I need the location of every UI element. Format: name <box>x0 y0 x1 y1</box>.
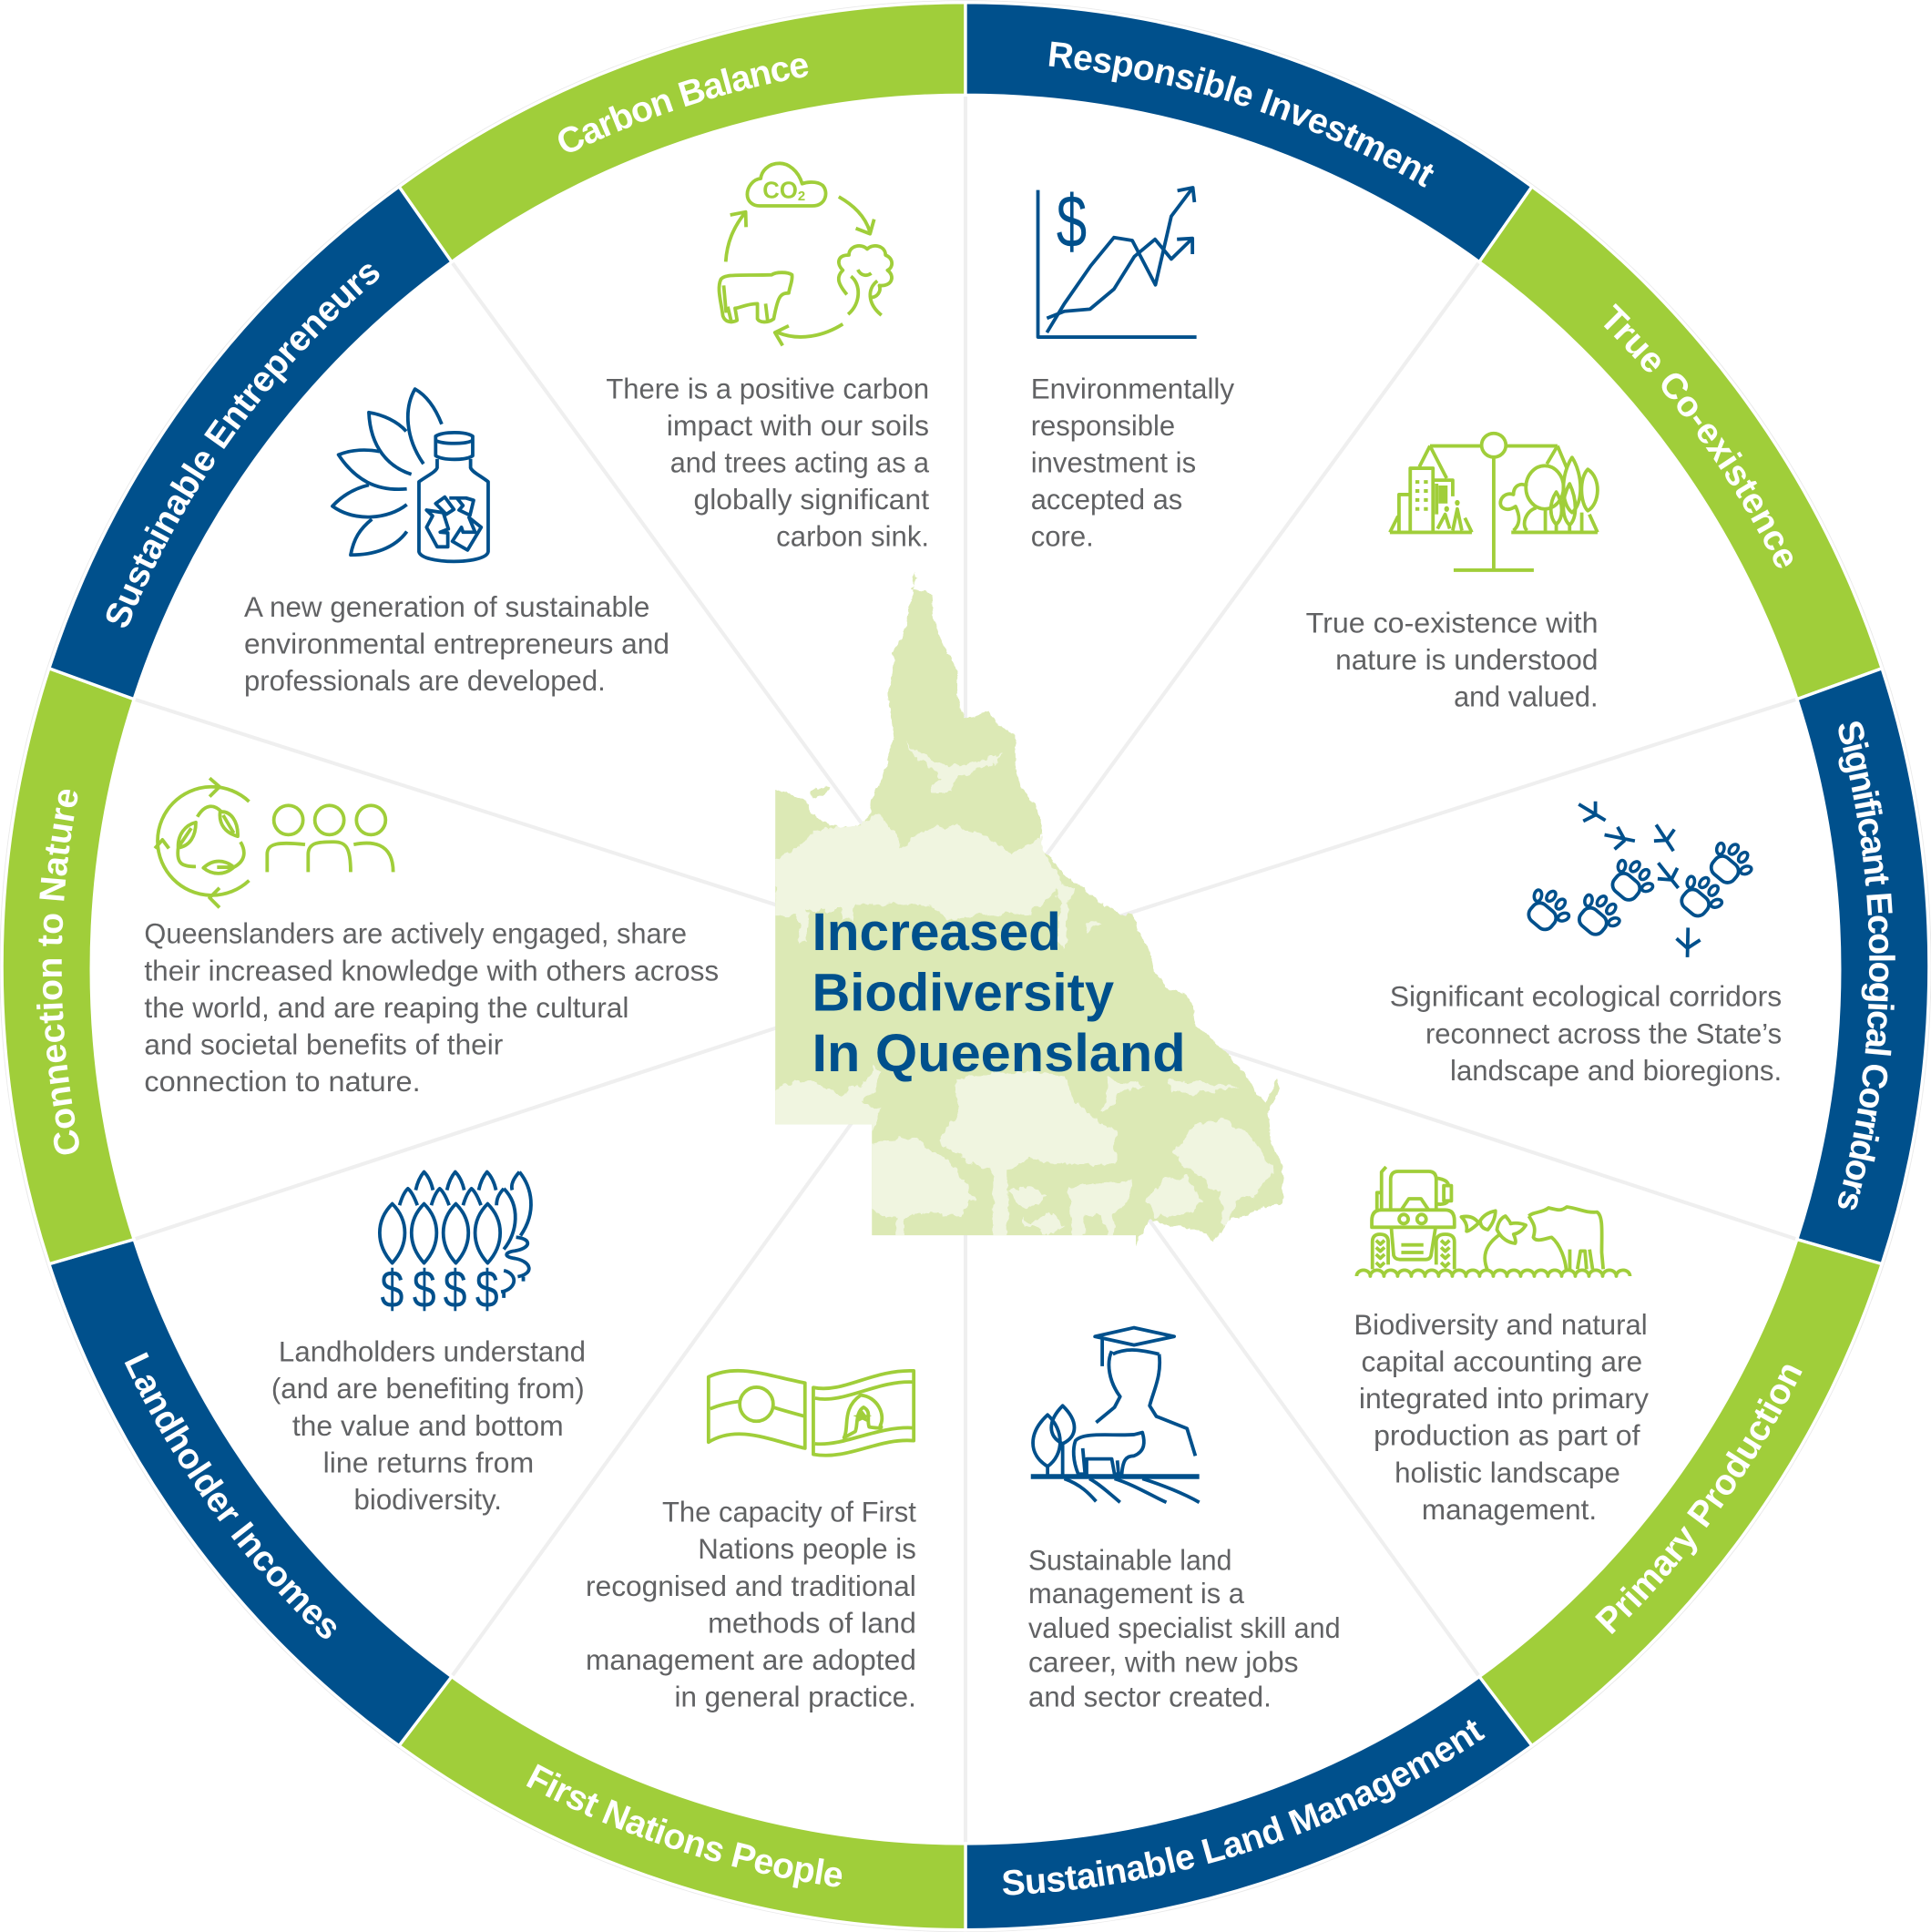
text: first nations people: management are adopted <box>586 1644 916 1676</box>
text: landholder incomes: the value and bottom <box>292 1410 564 1442</box>
icon: carbon cycle: 2 <box>798 189 805 204</box>
text: landholder incomes: (and are benefiting from) <box>271 1373 585 1405</box>
panel: responsible investment <box>964 1 1568 553</box>
label: sustainable land management: Sustainable Land Management <box>1003 1720 1486 1895</box>
text: connection to nature: the world, and are reaping the cultural <box>144 992 628 1024</box>
title <box>812 903 1186 1083</box>
text: sustainable land management: valued specialist skill and <box>1028 1612 1341 1644</box>
text: first nations people <box>586 1497 916 1713</box>
band: carbon balance <box>399 3 966 262</box>
text: responsible investment: responsible <box>1031 410 1175 442</box>
text: sustainable entrepreneurs: professionals are developed. <box>244 665 606 697</box>
panel: carbon balance <box>363 1 1002 563</box>
icon: balance scale city and forest <box>1390 434 1598 570</box>
text: sustainable land management <box>1028 1544 1341 1713</box>
text: landholder incomes: biodiversity. <box>354 1484 502 1516</box>
label: connection to nature: Connection to Nature <box>36 790 79 1155</box>
text: primary production <box>1354 1309 1649 1526</box>
text: sustainable entrepreneurs: environmental entrepreneurs and <box>244 629 669 660</box>
panel: landholder incomes <box>18 1136 586 1746</box>
text: connection to nature <box>144 918 719 1098</box>
text: sustainable land management: career, with new jobs <box>1028 1647 1299 1679</box>
text: true co-existence: True co-existence with <box>1306 608 1598 639</box>
panel: sustainable land management <box>929 1326 1532 1931</box>
text: primary production: integrated into primary <box>1359 1383 1649 1415</box>
icon: dollar crops <box>380 1172 531 1319</box>
text: significant ecological corridors: landscape and bioregions. <box>1450 1055 1782 1087</box>
text: true co-existence <box>1306 608 1598 713</box>
text: significant ecological corridors <box>1390 981 1782 1087</box>
text: responsible investment: accepted as <box>1031 484 1182 516</box>
text: carbon balance <box>606 373 930 553</box>
text: responsible investment: core. <box>1031 521 1094 553</box>
panel: true co-existence <box>1306 186 1883 713</box>
band: connection to nature <box>2 669 134 1264</box>
panel: first nations people <box>363 1368 967 1931</box>
text: responsible investment: Environmentally <box>1031 373 1235 404</box>
text: first nations people: in general practice. <box>675 1682 916 1713</box>
text: first nations people: The capacity of First <box>662 1497 916 1528</box>
panel: connection to nature <box>0 632 719 1265</box>
label: responsible investment: Responsible Investment <box>1049 42 1434 188</box>
icon: leaves and recycling bottle <box>332 389 488 561</box>
icon: tractor plant and cow <box>1356 1167 1630 1276</box>
text: landholder incomes: Landholders understand <box>279 1336 586 1368</box>
text: significant ecological corridors: reconnect across the State’s <box>1425 1017 1782 1049</box>
band: sustainable entrepreneurs <box>49 187 452 700</box>
text: significant ecological corridors: Significant ecological corridors <box>1390 981 1782 1013</box>
text: first nations people: Nations people is <box>698 1533 916 1565</box>
map of Queensland with wildlife silhouettes <box>766 572 1282 1248</box>
text: connection to nature: their increased knowledge with others across <box>144 955 719 986</box>
icon: dollar crops: $ <box>475 1260 499 1319</box>
text: first nations people: methods of land <box>708 1607 916 1639</box>
text: carbon balance: impact with our soils <box>667 410 929 442</box>
icon: dollar crops: $ <box>444 1260 466 1319</box>
text: landholder incomes: line returns from <box>323 1446 534 1478</box>
band: true co-existence <box>1479 187 1882 700</box>
text: sustainable entrepreneurs <box>244 591 669 697</box>
title: Increased <box>812 903 1061 962</box>
text: carbon balance: globally significant <box>693 484 929 516</box>
label: landholder incomes: Landholder Incomes <box>124 1352 337 1639</box>
text: responsible investment <box>1031 373 1235 553</box>
text: connection to nature: and societal benefits of their <box>144 1028 503 1060</box>
band: sustainable land management <box>966 1677 1532 1930</box>
label: significant ecological corridors: Significant Ecological Corridors <box>1838 721 1895 1210</box>
icon: dollar crops: $ <box>381 1260 404 1319</box>
panel: significant ecological corridors <box>1355 667 1931 1301</box>
text: carbon balance: There is a positive carbon <box>606 373 929 404</box>
text: connection to nature: Queenslanders are actively engaged, share <box>144 918 687 950</box>
text: sustainable land management: and sector created. <box>1028 1682 1272 1713</box>
panel: sustainable entrepreneurs <box>48 186 669 700</box>
panel: primary production <box>1317 1166 1883 1783</box>
text: primary production: holistic landscape <box>1395 1457 1620 1488</box>
icon: flags <box>709 1371 914 1456</box>
icon: leaves cycle and people <box>155 778 393 907</box>
text: connection to nature: connection to nature. <box>144 1066 421 1098</box>
text: sustainable land management: management is a <box>1028 1578 1245 1610</box>
icon: graduate with cow and trees <box>1031 1328 1200 1502</box>
text: primary production: management. <box>1422 1494 1597 1526</box>
label: carbon balance: Carbon Balance <box>558 58 809 152</box>
text: primary production: capital accounting are <box>1362 1345 1642 1377</box>
text: true co-existence: nature is understood <box>1335 644 1598 676</box>
band: responsible investment <box>966 3 1532 262</box>
band: significant ecological corridors <box>1797 669 1929 1264</box>
icon: investment chart <box>1038 180 1197 337</box>
icon: dollar crops: $ <box>413 1260 436 1319</box>
text: responsible investment: investment is <box>1031 447 1196 479</box>
label: first nations people: First Nations People <box>526 1763 842 1888</box>
text: primary production: production as part of <box>1374 1420 1640 1452</box>
title: Biodiversity <box>812 963 1114 1022</box>
label: true co-existence: True Co-existence <box>1603 303 1793 568</box>
text: carbon balance: carbon sink. <box>776 521 929 553</box>
text: true co-existence: and valued. <box>1454 681 1598 713</box>
band: first nations people <box>399 1677 966 1930</box>
icon: carbon cycle: CO <box>762 178 798 203</box>
label: primary production: Primary Production <box>1595 1365 1803 1634</box>
icon: animal tracks <box>1518 802 1760 957</box>
band: primary production <box>1479 1240 1882 1746</box>
text: landholder incomes <box>271 1336 586 1516</box>
band: landholder incomes <box>49 1240 452 1746</box>
text: sustainable entrepreneurs: A new generation of sustainable <box>244 591 649 623</box>
text: carbon balance: and trees acting as a <box>670 447 930 479</box>
text: sustainable land management: Sustainable land <box>1028 1544 1231 1576</box>
text: first nations people: recognised and traditional <box>586 1570 916 1602</box>
title: In Queensland <box>812 1024 1186 1083</box>
label: sustainable entrepreneurs: Sustainable Entrepreneurs <box>106 264 379 628</box>
text: primary production: Biodiversity and natural <box>1354 1309 1648 1341</box>
icon: carbon cycle <box>719 163 892 345</box>
icon: investment chart: $ <box>1057 180 1087 263</box>
